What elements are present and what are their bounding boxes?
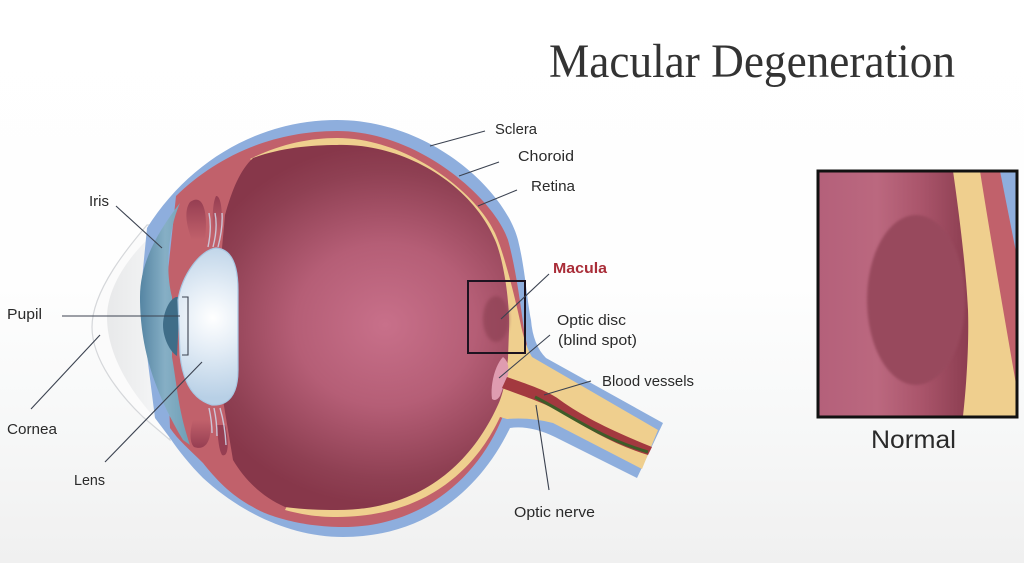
inset choroid (975, 171, 1017, 417)
label: Lens: Lens (74, 472, 105, 489)
iris (140, 203, 190, 445)
inset retina (953, 171, 1017, 416)
pupil (163, 297, 180, 356)
cornea (92, 225, 175, 440)
inset sclera (1000, 171, 1017, 257)
sclera (140, 120, 663, 537)
eye diagram (92, 120, 663, 537)
ciliary folds (186, 196, 228, 455)
choroid and ciliary body (165, 131, 527, 527)
label: Choroid: Choroid (518, 148, 574, 165)
label: Macula: Macula (553, 260, 608, 277)
optic disc (492, 357, 508, 400)
inset background (817, 170, 1018, 417)
title: Macular Degeneration (549, 35, 955, 88)
label: Pupil: Pupil (7, 306, 42, 323)
blood vessels (502, 377, 652, 455)
inset caption: Normal (871, 426, 956, 454)
inset macula (867, 215, 965, 385)
macula box (468, 281, 525, 353)
label: Optic disc: Optic disc (557, 312, 627, 329)
leader lines (31, 131, 591, 490)
inset frame (818, 171, 1017, 417)
label: Cornea: Cornea (7, 421, 58, 438)
lens (178, 248, 238, 405)
cornea inner (107, 230, 170, 420)
label: Retina: Retina (531, 178, 576, 195)
vitreous (222, 145, 509, 510)
macula (483, 296, 509, 342)
label: Iris: Iris (89, 193, 109, 210)
label: Optic nerve: Optic nerve (514, 504, 595, 521)
inset panel: normal macula (817, 170, 1018, 417)
retina and optic nerve (250, 138, 658, 517)
label: Sclera: Sclera (495, 121, 538, 138)
label: blind spot: (blind spot) (558, 332, 637, 349)
label: Blood vessels: Blood vessels (602, 373, 694, 390)
